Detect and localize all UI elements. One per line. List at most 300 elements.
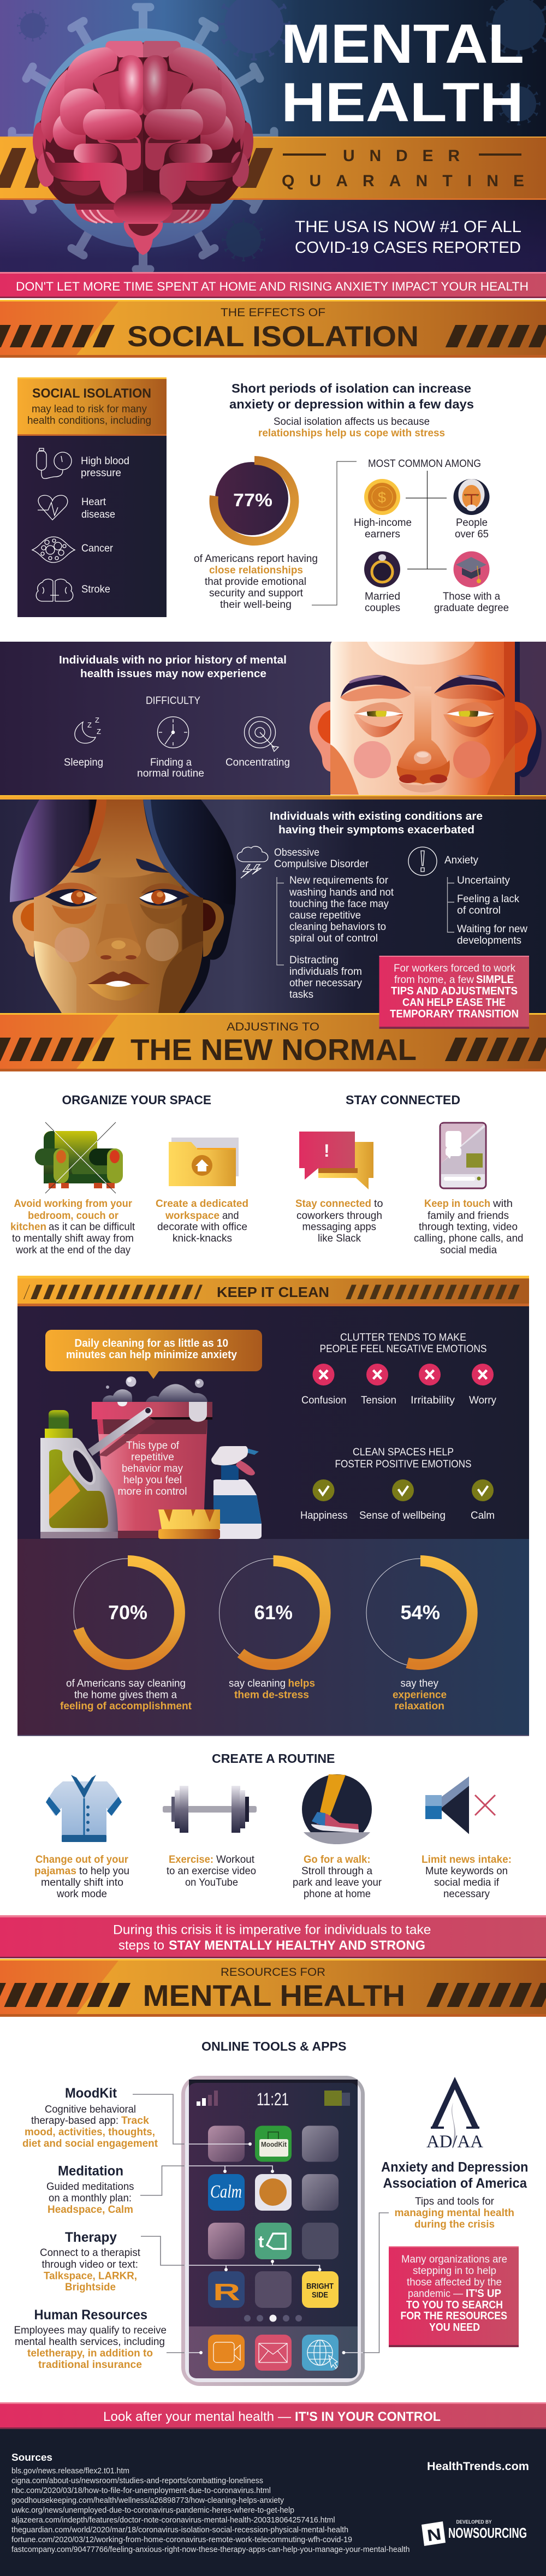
- text: OCD: tasks: [289, 988, 313, 1000]
- icon: graduation cap: [453, 552, 489, 588]
- text: close relationships: security and support: [209, 587, 304, 599]
- text: OCD: Distracting: [289, 954, 339, 966]
- footer: [0, 2429, 546, 2576]
- labels: positive emotions: Sense of wellbeing: [359, 1509, 446, 1521]
- text: go for a walk: phone at home: [304, 1888, 371, 1900]
- text: 61% caption: say cleaning: [229, 1678, 286, 1690]
- text: close relationships: of Americans report having: [194, 553, 318, 565]
- icon: coin: [364, 479, 400, 515]
- heading: clean spaces: CLEAN SPACES HELP: [353, 1446, 454, 1458]
- text: keep in touch: through texting, video: [419, 1221, 518, 1233]
- text: keep in touch: Keep in touch: [424, 1198, 490, 1210]
- section header: effects of social isolation: THE EFFECTS OF: [221, 306, 325, 319]
- section header: adjusting to the new normal: THE NEW NORMAL: [130, 1033, 417, 1067]
- pink banner: [0, 272, 546, 298]
- heading: short periods of isolation: anxiety or depression within a few days: [229, 397, 474, 411]
- section header: effects of social isolation: [0, 300, 546, 358]
- text: MoodKit: [22, 2086, 158, 2149]
- heading: clutter: CLUTTER TENDS TO MAKE: [340, 1331, 466, 1343]
- icon: exclamation: [408, 847, 437, 875]
- icon: moon: Z: [97, 727, 101, 736]
- text: dedicated workspace: Create a dedicated: [156, 1198, 248, 1210]
- text: anxiety: of control: [457, 904, 501, 916]
- text: MoodKit: Track: [121, 2115, 149, 2127]
- text: change pajamas: to help you: [79, 1865, 129, 1877]
- label: graduate degree: Those with a: [443, 590, 500, 602]
- title: HEALTH: [281, 72, 524, 133]
- pink banner: stay mentally healthy: steps to: [118, 1938, 164, 1953]
- text: meditation: Headspace, Calm: [48, 2204, 133, 2216]
- label: heart disease: [81, 496, 115, 520]
- app: Calm: Calm: [210, 2182, 242, 2202]
- sources: fastcompany.com/90477766/feeling-anxious-right-now-these-therapy-apps-can-help-you-manage-your-mental-health: [11, 2545, 410, 2554]
- text: meditation: [46, 2164, 134, 2216]
- app: Talkspace: t: [258, 2232, 264, 2251]
- icon: coin: $: [378, 489, 386, 506]
- text: avoid working from bedroom: kitchen: [10, 1221, 46, 1233]
- text: 61% caption: helps: [288, 1678, 315, 1690]
- brand: HealthTrends: HealthTrends.com: [427, 2460, 529, 2473]
- text: 61% caption: them de-stress: [234, 1689, 309, 1701]
- text: ADAA: Tips and tools for: [415, 2195, 494, 2207]
- labels: difficulty items: normal routine: [137, 767, 204, 779]
- text: 70% caption: the home gives them a: [74, 1689, 177, 1701]
- illustration: cleaning supplies: [40, 1376, 262, 1539]
- text: 61% caption: [229, 1678, 315, 1701]
- app: LARKR: R: [213, 2279, 240, 2306]
- text: meditation: on a monthly plan:: [49, 2192, 132, 2204]
- icon: folder: [169, 1138, 239, 1186]
- panel: social isolation conditions: may lead to risk for many: [32, 403, 147, 415]
- text: therapy: Therapy: [65, 2230, 117, 2245]
- text: repetitive behavior: [118, 1440, 187, 1497]
- text: OCD: New requirements for: [289, 874, 388, 886]
- section header: resources for mental health: MENTAL HEALTH: [143, 1979, 405, 2012]
- labels: negative emotions: Confusion: [301, 1394, 346, 1406]
- status bar: [197, 2089, 350, 2109]
- callout: organizations: pandemic —: [408, 2288, 463, 2300]
- heading: clutter: PEOPLE FEEL NEGATIVE EMOTIONS: [320, 1343, 487, 1355]
- text: repetitive behavior: This type of: [126, 1440, 180, 1452]
- labels: positive emotions: Happiness: [300, 1509, 348, 1521]
- chart: 54% ring: [366, 1559, 474, 1667]
- callout: organizations: those affected by the: [407, 2276, 502, 2288]
- heading: create a routine: CREATE A ROUTINE: [212, 1751, 335, 1766]
- text: change pajamas: Change out of your: [35, 1853, 128, 1866]
- illustration: man's face: [310, 642, 542, 795]
- text: keep in touch: family and friends: [428, 1210, 509, 1222]
- panel: social isolation conditions: [17, 377, 167, 617]
- labels: negative emotions: Worry: [469, 1394, 496, 1406]
- section header: resources for mental health: [0, 1959, 546, 2017]
- label: people over 65: over 65: [455, 528, 489, 540]
- text: anxiety: Anxiety: [444, 854, 478, 866]
- text: ADAA: Anxiety and Depression: [381, 2159, 529, 2175]
- callout: workers tips: [379, 956, 529, 1029]
- text: limit news: necessary: [443, 1888, 490, 1900]
- text: change pajamas: pajamas: [34, 1865, 76, 1877]
- logo: NowSourcing: [422, 2519, 527, 2546]
- text: avoid working from bedroom: [10, 1198, 135, 1256]
- label: people over 65: [455, 517, 489, 540]
- callout: workers tips: from home, a few: [394, 974, 474, 986]
- text: meditation: Meditation: [58, 2164, 123, 2179]
- panel: social isolation conditions: health conditions, including: [27, 414, 151, 427]
- pink banner: stay mentally healthy: [0, 1915, 546, 1958]
- label: married couples: [365, 590, 400, 614]
- leader lines: [133, 2094, 389, 2354]
- text: ADAA: Association of America: [383, 2176, 527, 2191]
- icon: armchair crossed out: [35, 1122, 123, 1193]
- icon: ring: [364, 552, 400, 588]
- text: stay connected: to: [374, 1198, 383, 1210]
- brain illustration: [33, 41, 253, 255]
- callout: organizations: FOR THE RESOURCES: [401, 2310, 507, 2322]
- icon: chat bubbles: [299, 1132, 373, 1189]
- label: high-income earners: earners: [365, 528, 400, 540]
- text: human resources: Employees may qualify to receive: [14, 2324, 167, 2336]
- app: Brightside: BRIGHT: [306, 2282, 334, 2291]
- logo: ADAA: AD/AA: [426, 2132, 483, 2152]
- text: close relationships: [194, 553, 318, 611]
- labels: negative emotions: Tension: [361, 1394, 396, 1406]
- text: change pajamas: [34, 1853, 129, 1900]
- heading: short periods of isolation: Short periods of isolation can increase: [232, 381, 471, 395]
- logo: NowSourcing: N: [426, 2525, 443, 2545]
- chart: 77% donut: [213, 460, 294, 541]
- heading: clutter: [320, 1331, 487, 1355]
- app: Brightside: SIDE: [312, 2290, 328, 2300]
- app: Calm: [208, 2174, 245, 2211]
- text: exercise: to an exercise video: [167, 1865, 256, 1877]
- app: MoodKit: MoodKit: [261, 2140, 287, 2148]
- text: anxiety: [444, 854, 528, 946]
- text: avoid working from bedroom: to mentally shift away from: [12, 1232, 134, 1244]
- labels: difficulty items: Finding a: [150, 756, 192, 768]
- most common among: [354, 458, 509, 614]
- icon: blood pressure cuff: [37, 448, 72, 478]
- label: heart disease: disease: [81, 508, 115, 520]
- banner: keep it clean: KEEP IT CLEAN: [217, 1284, 329, 1300]
- text: ADAA: [381, 2159, 529, 2230]
- most common among: MOST COMMON AMONG: [368, 458, 481, 470]
- callout: workers tips: For workers forced to work: [394, 962, 515, 974]
- icon: moon: Z: [95, 716, 99, 724]
- callout: organizations: YOU NEED: [429, 2322, 480, 2334]
- icon: smartphone messaging: [440, 1123, 486, 1188]
- icons: positive emotions: [312, 1479, 494, 1501]
- text: ADAA: during the crisis: [414, 2218, 495, 2230]
- text: change pajamas: work mode: [56, 1888, 107, 1900]
- label: graduate degree: graduate degree: [434, 602, 509, 614]
- text: close relationships: close relationships: [209, 564, 303, 576]
- pink banner: stay mentally healthy: STAY MENTALLY HEALTHY AND STRONG: [169, 1938, 425, 1953]
- callout: daily cleaning: Daily cleaning for as little as 10: [74, 1337, 228, 1349]
- text: 70% caption: feeling of accomplishment: [60, 1700, 192, 1712]
- heading: existing conditions: [270, 810, 483, 836]
- text: anxiety: Uncertainty: [457, 874, 510, 886]
- bucket: [88, 1402, 212, 1538]
- text: repetitive behavior: repetitive: [131, 1451, 174, 1463]
- icon: older man: [453, 479, 489, 515]
- hero statement: THE USA IS NOW #1 OF ALL: [295, 218, 521, 236]
- text: MoodKit: MoodKit: [65, 2086, 117, 2101]
- section header: effects of social isolation: SOCIAL ISOLATION: [127, 321, 419, 353]
- chart: 61% ring: [219, 1559, 328, 1667]
- heading: organize your space: ORGANIZE YOUR SPACE: [62, 1093, 211, 1107]
- pink banner: in your control: Look after your mental health —: [103, 2409, 291, 2424]
- sources: Sources: [11, 2452, 52, 2463]
- logo: NowSourcing: DEVELOPED BY: [456, 2519, 492, 2525]
- label: high-income earners: [354, 517, 412, 540]
- sources: [11, 2452, 410, 2554]
- label: cancer: Cancer: [81, 542, 113, 554]
- virus illustration: [12, 7, 274, 269]
- scrub brush: [158, 1509, 220, 1539]
- sources: aljazeera.com/indepth/features/doctor-note-coronavirus-mental-health-200318064257416.html: [11, 2516, 335, 2525]
- text: avoid working from bedroom: bedroom, couch or: [28, 1210, 118, 1222]
- sources: goodhousekeeping.com/health/wellness/a26898773/how-cleaning-helps-anxiety: [11, 2496, 284, 2505]
- icon: moon: Z: [87, 721, 92, 729]
- sources: theguardian.com/world/2020/mar/18/coronavirus-isolation-social-recession-physical-mental-health: [11, 2526, 348, 2534]
- label: people over 65: People: [456, 517, 488, 529]
- callout: workers tips: SIMPLE: [476, 974, 514, 986]
- text: human resources: [14, 2307, 167, 2371]
- label: high blood pressure: [81, 455, 129, 479]
- heading: no prior history: Individuals with no prior history of mental: [59, 654, 287, 666]
- text: human resources: Human Resources: [34, 2307, 147, 2323]
- text: keep in touch: with: [492, 1198, 513, 1210]
- text: go for a walk: [293, 1853, 382, 1900]
- callout: organizations: stepping in to help: [413, 2265, 496, 2277]
- heading: stay connected: STAY CONNECTED: [346, 1093, 460, 1107]
- text: OCD: individuals from: [289, 966, 362, 978]
- icon: chat bubbles: !: [324, 1141, 330, 1160]
- text: meditation: Guided meditations: [46, 2181, 134, 2193]
- heading: no prior history: [59, 654, 287, 680]
- text: OCD: washing hands and not: [289, 886, 394, 898]
- callout: organizations: Many organizations are: [401, 2253, 507, 2265]
- app: MoodKit: [255, 2125, 292, 2162]
- label: stroke: Stroke: [81, 583, 110, 595]
- icon: clock: [157, 716, 189, 748]
- label: high-income earners: High-income: [354, 517, 412, 529]
- labels: difficulty items: Concentrating: [225, 756, 290, 768]
- icon: dumbbell: [163, 1786, 257, 1833]
- title: MENTAL: [281, 14, 524, 75]
- illustration: phone with apps: [181, 2076, 365, 2386]
- text: dedicated workspace: workspace: [165, 1210, 219, 1222]
- text: limit news: Mute keywords on: [425, 1865, 508, 1877]
- soap foam: [103, 1376, 207, 1402]
- callout: organizations: TO YOU TO SEARCH: [406, 2299, 503, 2311]
- subtitle: under quarantine: UNDER: [343, 147, 460, 165]
- text: repetitive behavior: more in control: [118, 1485, 187, 1497]
- sources: uwkc.org/news/unemployed-due-to-coronavirus-pandemic-heres-where-to-get-help: [11, 2506, 294, 2515]
- text: stay connected: Stay connected: [295, 1198, 371, 1210]
- text: avoid working from bedroom: work at the end of the day: [15, 1244, 130, 1256]
- subtitle: under quarantine: QUARANTINE: [282, 172, 524, 190]
- label: heart disease: Heart: [81, 496, 106, 508]
- label: married couples: couples: [365, 602, 400, 614]
- app grid: [208, 2125, 339, 2308]
- labels: difficulty items: [64, 756, 290, 779]
- text: repetitive behavior: help you feel: [123, 1474, 182, 1486]
- text: OCD: cause repetitive: [289, 909, 361, 921]
- labels: difficulty items: Sleeping: [64, 756, 103, 768]
- page dots: [244, 2314, 302, 2322]
- spray bottle: [211, 1446, 262, 1539]
- dock apps: [208, 2335, 339, 2371]
- text: dedicated workspace: knick-knacks: [173, 1232, 232, 1244]
- detergent bottle: [40, 1410, 118, 1538]
- text: change pajamas: mentally shift into: [41, 1876, 123, 1888]
- text: OCD: other necessary: [289, 977, 362, 989]
- label: married couples: Married: [365, 590, 400, 602]
- panel: social isolation conditions: SOCIAL ISOLATION: [32, 386, 151, 401]
- chart: 70% ring: [74, 1559, 182, 1667]
- icon: storm cloud: [237, 846, 268, 878]
- text: keep in touch: calling, phone calls, and: [414, 1232, 523, 1244]
- app: Brightside: [302, 2271, 339, 2308]
- callout: workers tips: TIPS AND ADJUSTMENTS: [391, 985, 518, 997]
- text: 54% caption: say they: [401, 1678, 438, 1690]
- callout: daily cleaning: minutes can help minimize anxiety: [66, 1349, 238, 1361]
- labels: positive emotions: Calm: [471, 1509, 495, 1521]
- text: keep in touch: social media: [440, 1244, 497, 1256]
- text: human resources: teletherapy, in addition to: [27, 2347, 153, 2359]
- app: Headspace: [255, 2174, 292, 2211]
- pink banner: in your control: IT'S IN YOUR CONTROL: [295, 2409, 441, 2424]
- labels: negative emotions: Irritability: [411, 1394, 455, 1406]
- text: go for a walk: park and leave your: [293, 1876, 382, 1888]
- label: high blood pressure: High blood: [81, 455, 129, 467]
- text: repetitive behavior: behavior may: [122, 1462, 183, 1474]
- text: therapy: [40, 2230, 141, 2293]
- text: OCD: spiral out of control: [289, 932, 378, 944]
- text: exercise: Workout: [216, 1853, 255, 1866]
- sources: cigna.com/about-us/newsroom/studies-and-reports/combatting-loneliness: [11, 2477, 263, 2485]
- text: why isolation affects us: Social isolation affects us because: [274, 416, 430, 428]
- label: difficulty: DIFFICULTY: [146, 695, 200, 707]
- icon: cancer cells: [32, 537, 75, 562]
- text: 54% caption: experience: [393, 1689, 447, 1701]
- text: exercise: [167, 1853, 256, 1888]
- section header: adjusting to the new normal: ADJUSTING TO: [227, 1020, 319, 1033]
- panel: cleaning statistics: [17, 1539, 529, 1736]
- text: anxiety: Feeling a lack: [457, 893, 519, 905]
- connector lines: [312, 461, 447, 605]
- text: MoodKit: diet and social engagement: [22, 2137, 158, 2149]
- text: avoid working from bedroom: Avoid working from your: [14, 1198, 132, 1210]
- text: stay connected: [295, 1198, 383, 1244]
- illustration: woman's face: [10, 800, 236, 1013]
- chart: 54% ring: 54%: [401, 1601, 440, 1624]
- icon: shirt: [46, 1775, 122, 1842]
- callout: workers tips: CAN HELP EASE THE: [402, 997, 506, 1009]
- text: why isolation affects us: [258, 416, 445, 439]
- callout: organizations: [389, 2246, 519, 2347]
- label: graduate degree: [434, 590, 509, 614]
- text: human resources: mental health services, including: [15, 2336, 165, 2348]
- chart: 70% ring: 70%: [108, 1601, 147, 1624]
- heading: no prior history: health issues may now experience: [80, 668, 266, 680]
- text: MoodKit: therapy-based app:: [31, 2115, 118, 2127]
- text: OCD: touching the face may: [289, 898, 389, 910]
- sources: fortune.com/2020/03/12/working-from-home-coronavirus-remote-work-telecommuting-wfh-covid-19: [11, 2536, 352, 2544]
- heading: short periods of isolation: [229, 381, 474, 411]
- heading: online tools and apps: ONLINE TOOLS & APPS: [201, 2039, 346, 2053]
- heading: existing conditions: having their symptoms exacerbated: [278, 824, 474, 836]
- sources: bls.gov/news.release/flex2.t01.htm: [11, 2467, 129, 2476]
- text: human resources: traditional insurance: [38, 2359, 142, 2371]
- text: why isolation affects us: relationships help us cope with stress: [258, 427, 445, 439]
- icon: muted speaker: [425, 1776, 495, 1834]
- labels: negative emotions: [301, 1394, 496, 1406]
- text: go for a walk: Go for a walk:: [304, 1853, 370, 1866]
- heading: clean spaces: FOSTER POSITIVE EMOTIONS: [335, 1458, 472, 1470]
- text: limit news: Limit news intake:: [422, 1853, 512, 1866]
- banner: keep it clean: [17, 1276, 529, 1306]
- text: stay connected: coworkers through: [296, 1210, 382, 1222]
- text: MoodKit: Cognitive behavioral: [45, 2104, 136, 2116]
- text: therapy: Talkspace, LARKR,: [44, 2270, 137, 2282]
- icon: walking shoe: [302, 1774, 372, 1844]
- icons: negative emotions: [312, 1364, 494, 1385]
- text: close relationships: that provide emotional: [205, 576, 306, 588]
- text: stay connected: messaging apps: [302, 1221, 376, 1233]
- text: 70% caption: of Americans say cleaning: [66, 1678, 186, 1690]
- text: keep in touch: [414, 1198, 523, 1256]
- text: avoid working from bedroom: as it can be difficult: [49, 1221, 135, 1233]
- text: dedicated workspace: and: [222, 1210, 239, 1222]
- text: go for a walk: Stroll through a: [301, 1865, 372, 1877]
- caution band: under quarantine: [0, 137, 546, 200]
- callout: workers tips: TEMPORARY TRANSITION: [390, 1008, 519, 1020]
- text: OCD: Obsessive: [274, 846, 319, 858]
- icon: heart: [38, 495, 68, 520]
- section header: resources for mental health: RESOURCES FOR: [221, 1965, 325, 1979]
- hero statement: COVID-19 CASES REPORTED: [295, 239, 521, 257]
- heading: existing conditions: Individuals with existing conditions are: [270, 810, 483, 822]
- pink banner: in your control: [0, 2402, 546, 2429]
- logo: ADAA: [426, 2077, 483, 2152]
- hero background: [0, 0, 546, 273]
- text: anxiety: developments: [457, 934, 521, 946]
- labels: positive emotions: [300, 1509, 495, 1521]
- text: ADAA: managing mental health: [394, 2207, 514, 2219]
- text: therapy: through video or text:: [41, 2259, 138, 2271]
- app: LARKR: [208, 2271, 245, 2308]
- title: [281, 14, 524, 133]
- text: anxiety: Waiting for new: [457, 923, 528, 935]
- hero statement: [295, 218, 521, 257]
- text: exercise: Exercise:: [169, 1853, 213, 1866]
- divider band: [0, 795, 546, 800]
- panel: no prior history: [0, 642, 546, 795]
- section header: adjusting to the new normal: [0, 1013, 546, 1071]
- icon: target: [245, 716, 278, 751]
- status bar: 11:21: [257, 2089, 289, 2109]
- callout: daily cleaning: [45, 1330, 262, 1379]
- panel: cleaning: [17, 1306, 529, 1539]
- text: OCD: Compulsive Disorder: [274, 858, 369, 870]
- text: dedicated workspace: decorate with office: [157, 1221, 247, 1233]
- icon: moon: [75, 716, 101, 743]
- panel: existing conditions: [0, 800, 546, 1013]
- chart: 61% ring: 61%: [254, 1601, 293, 1624]
- text: 54% caption: relaxation: [394, 1700, 444, 1712]
